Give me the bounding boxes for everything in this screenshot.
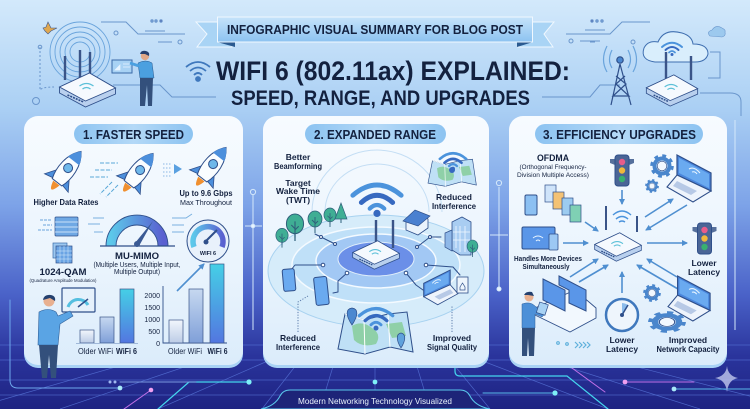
text: lower latency right <box>688 258 720 277</box>
bar chart: large: Older WiFi <box>168 347 202 356</box>
title <box>186 56 570 110</box>
house <box>403 210 430 235</box>
icon: gear large <box>651 313 683 331</box>
bar chart: large <box>144 264 228 356</box>
panel: faster speed <box>24 116 243 378</box>
sparkle <box>43 22 57 34</box>
text: lower latency <box>606 335 638 354</box>
heading <box>535 124 703 144</box>
text: target wake time: Wake Time <box>276 186 320 196</box>
text: signal quality: Signal Quality <box>427 342 477 352</box>
bar chart: small: WiFi 6 <box>116 347 137 356</box>
small cloud <box>708 26 725 37</box>
signal rings <box>268 150 484 327</box>
small gauge: WIFI 6 <box>200 251 216 257</box>
building <box>445 217 478 257</box>
bar chart: large: 1500 <box>144 305 160 312</box>
text: higher data rates: Higher Data Rates <box>34 197 99 207</box>
bar chart: large: 0 <box>156 341 160 348</box>
person right <box>522 292 548 356</box>
text: lower latency: Lower <box>609 335 635 345</box>
text: handles more devices <box>514 254 582 271</box>
text: max throughput <box>180 188 233 207</box>
router <box>353 220 399 269</box>
text: signal quality <box>427 333 477 352</box>
text: better beamforming <box>274 152 322 171</box>
text: lower latency right: Lower <box>691 258 717 268</box>
bar chart: large: 2000 <box>144 293 160 300</box>
footer caption: Modern Networking Technology Visualized <box>298 396 452 406</box>
trees <box>276 203 347 248</box>
big gauge <box>88 214 192 247</box>
heading: 1. FASTER SPEED <box>83 128 184 142</box>
icon: gears <box>646 156 672 192</box>
text: qam: 1024-QAM <box>40 267 87 278</box>
text: target wake time: (TWT) <box>286 195 310 205</box>
icon: wifi title <box>186 62 210 81</box>
icon: gear small <box>644 285 660 301</box>
text: ofdma: Division Multiple Access) <box>517 172 589 179</box>
text: handles more devices: Handles More Devices <box>514 254 582 263</box>
heading: 2. EXPANDED RANGE <box>314 128 436 142</box>
text: mu-mimo <box>94 251 181 276</box>
person left <box>130 51 154 106</box>
laptop <box>424 270 468 305</box>
text: reduced interference top: Reduced <box>436 192 472 202</box>
text: handles more devices: Simultaneously <box>522 262 570 271</box>
text: mu-mimo: Multiple Output) <box>114 269 160 276</box>
text: ofdma <box>517 153 589 179</box>
screen <box>112 60 132 73</box>
side connectors <box>245 120 735 330</box>
dotted leaders <box>298 296 452 332</box>
icon: traffic light top <box>610 155 634 186</box>
panel: efficiency upgrades <box>509 116 727 368</box>
banner <box>196 17 554 47</box>
bar chart: large: WiFi 6 <box>208 347 228 356</box>
text: reduced interference top <box>432 192 476 211</box>
footer circuit traces <box>10 300 750 409</box>
sparkle bottom right <box>715 366 738 392</box>
arrow: growth <box>177 264 204 291</box>
text: max throughput: Up to 9.6 Gbps <box>180 188 233 198</box>
tower <box>604 46 636 105</box>
text: target wake time <box>276 178 320 205</box>
text: reduced interference bottom <box>276 333 320 352</box>
router left <box>60 50 116 107</box>
heading <box>305 124 446 144</box>
text: lower latency right: Latency <box>688 267 720 277</box>
text: signal quality: Improved <box>433 333 471 343</box>
text: network capacity: Improved <box>669 335 707 345</box>
bar chart: small: Older WiFi <box>78 347 113 356</box>
text: max throughput: Max Throughout <box>180 198 233 207</box>
text: reduced interference bottom: Interference <box>276 342 320 352</box>
text: ofdma: (Orthogonal Frequency- <box>520 164 586 171</box>
text: mu-mimo: (Multiple Users, Multiple Input, <box>94 262 181 269</box>
icon: server list <box>38 217 78 236</box>
header decoration left <box>32 20 216 107</box>
bar chart: large: 1000 <box>144 317 160 324</box>
text: reduced interference top: Interference <box>432 201 476 211</box>
header decoration right <box>542 20 741 116</box>
text: network capacity <box>656 335 720 354</box>
bar chart: small <box>76 289 138 356</box>
bar chart: large: 500 <box>148 329 160 336</box>
connectors <box>291 234 460 293</box>
heading: 3. EFFICIENCY UPGRADES <box>543 128 696 142</box>
icon: laptop lower <box>668 276 710 321</box>
icon: documents <box>545 185 581 222</box>
footer caption <box>261 390 490 409</box>
cloud <box>643 32 708 62</box>
icon: clock <box>606 299 638 331</box>
icon: laptop top <box>667 155 711 202</box>
small gauge <box>187 220 229 262</box>
person with screen <box>38 288 95 378</box>
text: qam: (Quadrature Amplitude Modulation) <box>30 278 97 283</box>
chevrons <box>557 342 590 348</box>
text: mu-mimo: MU-MIMO <box>115 251 159 262</box>
icon: tablet and phone <box>522 227 558 250</box>
title: SPEED, RANGE, AND UPGRADES <box>231 86 530 110</box>
panel: expanded range <box>263 116 489 368</box>
text: reduced interference bottom: Reduced <box>280 333 316 343</box>
phones <box>282 269 329 306</box>
text: network capacity: Network Capacity <box>656 344 720 354</box>
router <box>595 206 641 261</box>
heading <box>74 124 193 144</box>
icon: top map <box>428 153 476 186</box>
icon: small wifi <box>613 211 631 222</box>
text: ofdma: OFDMA <box>537 153 569 163</box>
text: target wake time: Target <box>285 178 311 188</box>
icon: big wifi <box>353 185 401 217</box>
router right <box>646 52 698 106</box>
icon: phone <box>525 195 537 215</box>
icon: bottom map <box>338 308 413 354</box>
text: qam <box>30 267 97 283</box>
text: lower latency: Latency <box>606 344 638 354</box>
icon: qam grid <box>53 243 72 263</box>
icon: traffic light right <box>692 223 716 254</box>
monitors on platform <box>535 276 596 332</box>
banner: INFOGRAPHIC VISUAL SUMMARY FOR BLOG POST <box>227 23 523 37</box>
text: better beamforming: Beamforming <box>274 161 322 171</box>
arrows <box>563 190 687 293</box>
title: WIFI 6 (802.11ax) EXPLAINED: <box>216 56 570 86</box>
text: better beamforming: Better <box>286 152 311 162</box>
wifi rings <box>50 22 110 82</box>
circuit lines left <box>32 20 216 104</box>
rockets <box>40 138 238 201</box>
